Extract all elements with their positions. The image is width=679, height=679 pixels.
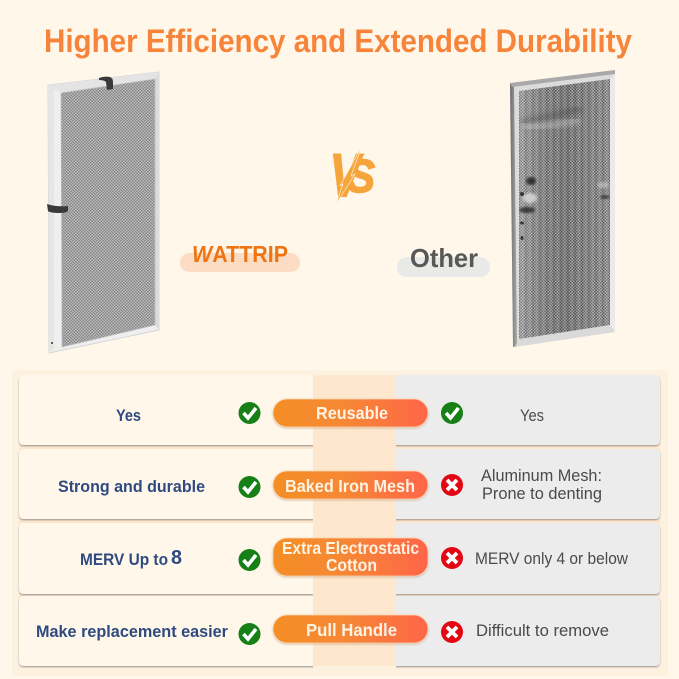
center pill labels: Pull Handle: [306, 620, 397, 640]
right column text: [475, 406, 629, 640]
center pills: [273, 399, 428, 643]
right column text: Yes: [520, 406, 544, 425]
icon: green check, right: [441, 402, 463, 424]
right column text: MERV only 4 or below: [475, 549, 629, 568]
right column text: Difficult to remove: [476, 621, 609, 640]
right column text: Aluminum Mesh:: [481, 466, 602, 485]
right column text: Prone to denting: [482, 484, 602, 503]
comparison table: [12, 370, 668, 676]
center pill labels: Baked Iron Mesh: [285, 476, 415, 496]
brand label: Other: [397, 243, 490, 277]
title: Higher Efficiency and Extended Durability: [44, 23, 632, 59]
left column text: Yes: [116, 406, 141, 425]
icons: green checks, left: [238, 402, 260, 645]
VS badge: V: [330, 142, 364, 209]
right column rows: [380, 375, 660, 666]
center pill labels: Cotton: [326, 555, 377, 575]
left column text: Make replacement easier: [36, 622, 228, 641]
brand label: Other: Other: [410, 243, 478, 273]
left column text: 8: [171, 547, 182, 569]
icons: red crosses, right: [441, 474, 463, 643]
center pill labels: Extra Electrostatic: [282, 538, 419, 558]
left column rows: [19, 375, 330, 666]
VS badge: S: [347, 150, 375, 202]
dents and creases: [519, 108, 610, 240]
left column text: Strong and durable: [58, 477, 205, 496]
brand label: WATTRIP: WATTRIP: [192, 241, 288, 267]
handle: top: [99, 77, 113, 90]
product image: other filter: [510, 70, 615, 347]
left column text: MERV Up to: [80, 550, 168, 569]
handle: side: [47, 204, 68, 213]
center pill labels: [282, 403, 419, 640]
left column text: [36, 406, 228, 641]
product image: WATTRIP filter: [47, 72, 159, 353]
center pill labels: Reusable: [316, 403, 388, 423]
